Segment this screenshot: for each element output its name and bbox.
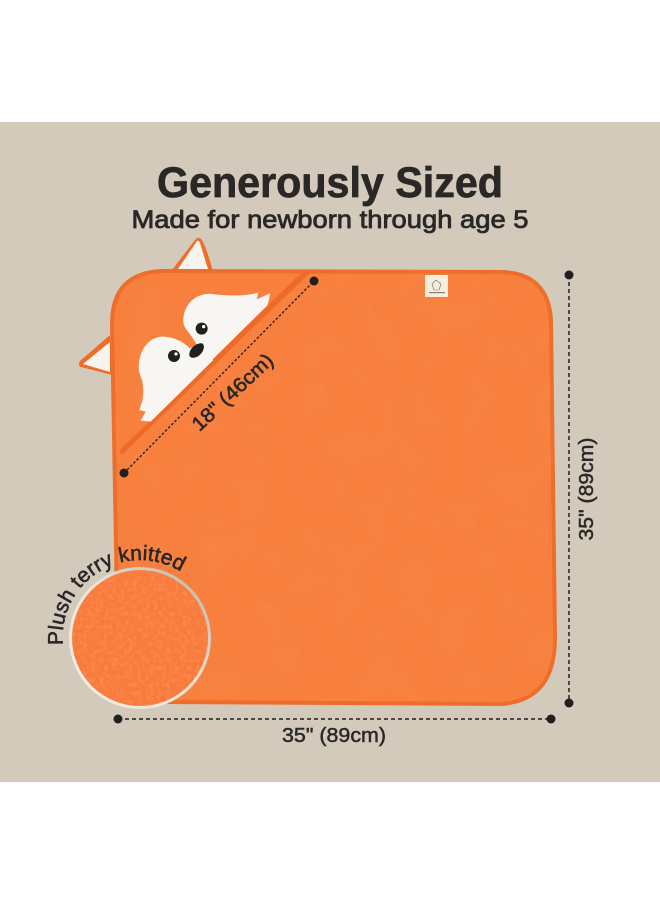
icon: top fox ear [172,238,213,271]
dimension: width [114,714,556,747]
background panel [0,122,660,782]
dimension: hood diagonal [120,276,318,478]
subtitle: Made for newborn through age 5 [132,206,528,234]
terry texture magnifier [69,567,211,709]
towel illustration [79,238,558,706]
brand label [425,275,448,297]
diagonal label: 18" (46cm) [188,349,278,436]
dimension: height [564,270,598,708]
towel body [110,269,558,706]
fox nose [189,343,204,358]
height label: 35" (89cm) [576,438,598,540]
fox face white patch upper [183,293,270,362]
fox face white patch lower [139,337,213,422]
title: Generously Sized [157,159,503,207]
icon: left fox ear [79,335,112,375]
fox right eye [196,323,208,335]
fox left eye [168,350,180,362]
towel hood with fox face [120,272,310,456]
width label: 35" (89cm) [282,725,386,747]
curved label: plush terry knitted: Plush terry knitted [48,544,188,644]
